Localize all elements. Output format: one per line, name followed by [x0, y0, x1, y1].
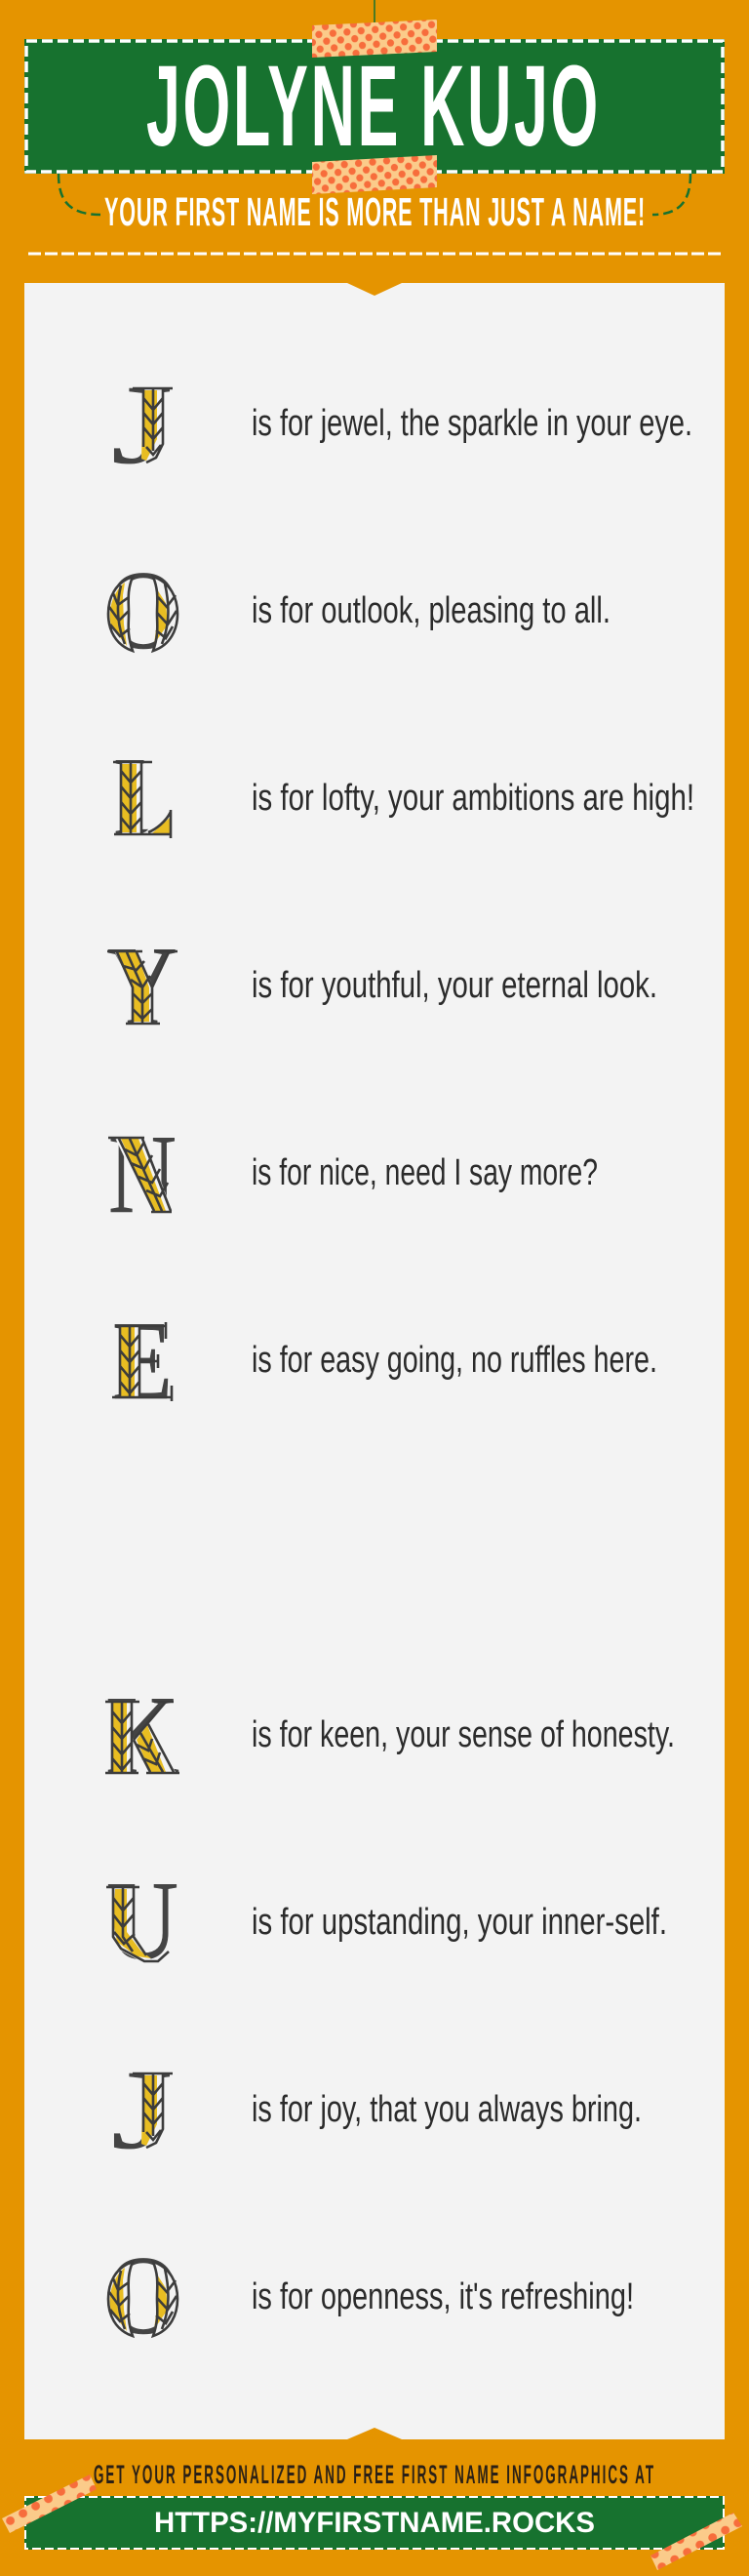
row: J is for jewel: [111, 363, 692, 488]
footer left tape: [2, 2475, 97, 2533]
letter O: O: [107, 548, 179, 673]
letter O: O: [107, 2234, 179, 2358]
footer banner: [24, 2496, 725, 2550]
row: L is for lofty: [113, 735, 694, 860]
panel: name letters: [24, 283, 725, 2439]
text: is for openness, it's refreshing!: [252, 2276, 634, 2317]
letter Y: Y: [107, 924, 177, 1049]
text: is for nice, need I say more?: [252, 1152, 598, 1193]
text: is for outlook, pleasing to all.: [252, 590, 611, 631]
letter J: J: [111, 363, 173, 488]
subtitle connectors: [59, 174, 690, 215]
header hanging line: [374, 0, 375, 25]
row: O is for openness: [107, 2234, 634, 2358]
row: U is for upstanding: [106, 1859, 667, 1984]
letter U: U: [106, 1859, 178, 1984]
letter K: K: [105, 1673, 179, 1798]
footer right tape: [650, 2513, 742, 2570]
letter J: J: [111, 2048, 173, 2173]
footer url: HTTPS://MYFIRSTNAME.ROCKS: [154, 2507, 595, 2539]
row: Y is for youthful: [107, 924, 657, 1049]
row: N is for nice: [108, 1112, 598, 1237]
top tape: [312, 20, 437, 58]
bottom tape: [312, 155, 437, 194]
row: K is for keen: [105, 1673, 675, 1798]
dashed divider: [28, 252, 721, 256]
row: O is for outlook: [107, 548, 611, 673]
header banner: [24, 39, 725, 174]
letter N: N: [108, 1112, 177, 1237]
letter E: E: [112, 1299, 173, 1424]
row: J is for joy: [111, 2048, 642, 2173]
row: E is for easy going: [112, 1299, 657, 1424]
letter L: L: [113, 735, 174, 860]
